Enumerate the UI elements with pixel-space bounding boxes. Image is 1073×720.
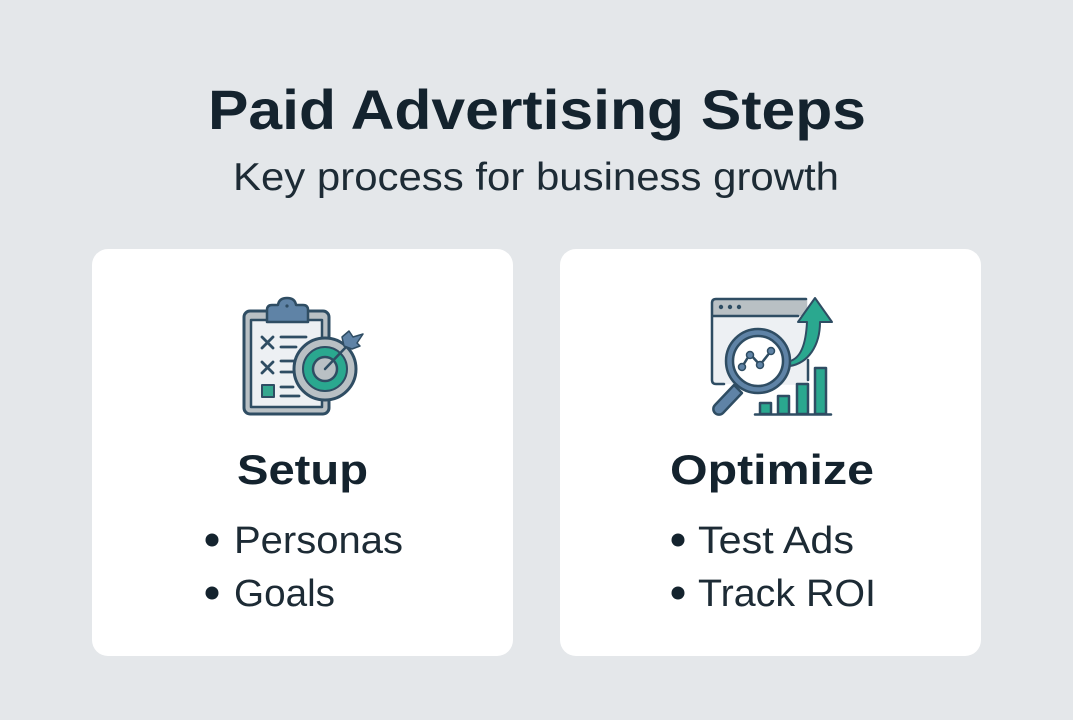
list: optimize items: Track ROI	[698, 573, 876, 615]
heading: optimize: Optimize	[670, 446, 874, 493]
list: optimize items	[672, 520, 876, 615]
heading: setup: Setup	[237, 446, 368, 493]
list: setup items: Goals	[234, 573, 335, 615]
panel: setup	[92, 249, 513, 656]
icon: browser, magnifier and growth chart	[712, 298, 832, 415]
list: optimize items: Test Ads	[698, 520, 854, 562]
list: setup items: Personas	[234, 520, 403, 562]
icon: clipboard with target	[244, 298, 363, 414]
list: setup items	[206, 520, 403, 615]
title: Paid Advertising Steps	[208, 78, 866, 141]
panel: optimize	[560, 249, 981, 656]
subtitle: Key process for business growth	[233, 156, 839, 199]
